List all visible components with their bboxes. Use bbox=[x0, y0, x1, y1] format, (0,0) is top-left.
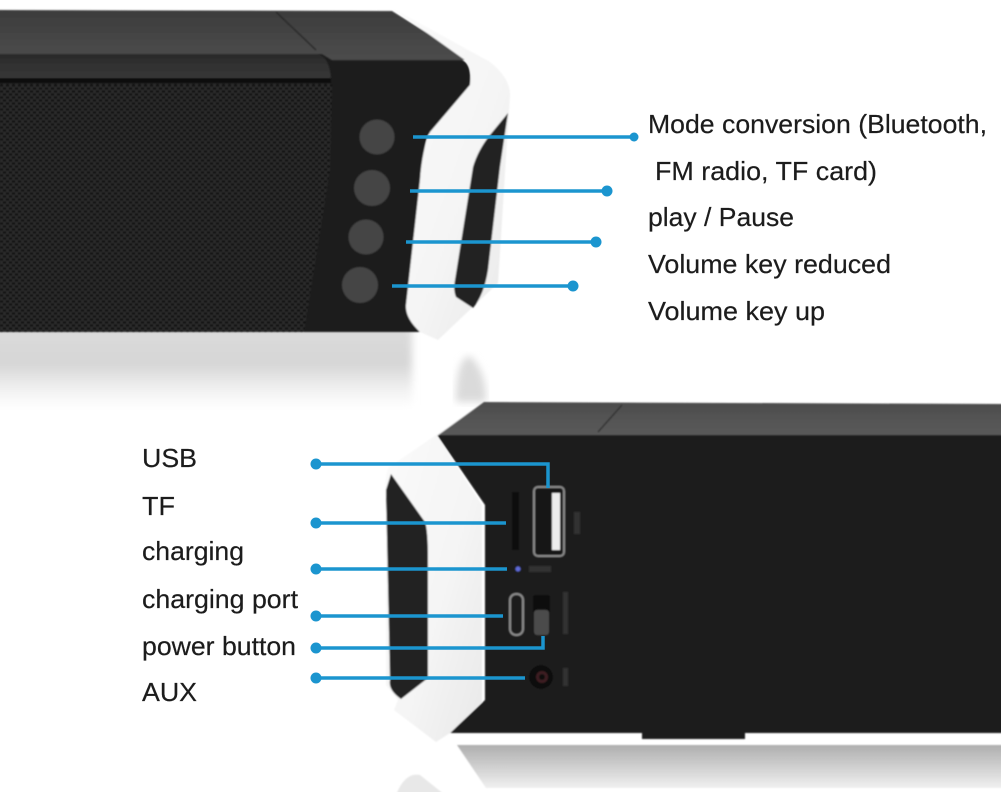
text: upper speaker labels: play / Pause bbox=[648, 202, 794, 232]
LED indicator bbox=[516, 566, 520, 572]
text: upper speaker labels: Volume key reduced bbox=[648, 249, 891, 279]
port markings bbox=[529, 512, 580, 686]
speaker top face bbox=[437, 402, 1001, 435]
volume down button bbox=[348, 220, 384, 254]
text: lower speaker labels: charging port bbox=[142, 584, 299, 614]
white end cap bbox=[385, 402, 484, 742]
text: lower speaker labels: USB bbox=[142, 443, 197, 473]
text: lower speaker labels: charging bbox=[142, 536, 244, 566]
white end cap bbox=[392, 8, 510, 340]
text: upper speaker labels bbox=[648, 109, 987, 326]
speaker front body bbox=[0, 54, 470, 332]
text: lower speaker labels: AUX bbox=[142, 677, 197, 707]
mode button bbox=[360, 120, 394, 154]
play button bbox=[354, 170, 390, 206]
callout lines: lower speaker bbox=[310, 458, 548, 684]
TF card slot bbox=[512, 492, 519, 550]
text: upper speaker labels: Mode conversion (Bluetooth, bbox=[648, 109, 987, 139]
callout lines: upper speaker bbox=[392, 132, 638, 292]
text: upper speaker labels: FM radio, TF card) bbox=[655, 156, 877, 186]
text: lower speaker labels bbox=[142, 443, 299, 707]
speaker mesh grille bbox=[0, 84, 332, 332]
volume up button bbox=[342, 267, 378, 303]
USB port bbox=[534, 487, 564, 556]
speaker top face bbox=[0, 10, 470, 60]
end cap opening bbox=[454, 113, 508, 308]
panel: lower speaker reflection bbox=[396, 745, 1001, 792]
end cap opening bbox=[386, 474, 428, 699]
panel: upper speaker reflection bbox=[0, 320, 486, 408]
panel: upper speaker front view bbox=[0, 8, 510, 340]
text: lower speaker labels: TF bbox=[142, 491, 175, 521]
text: upper speaker labels: Volume key up bbox=[648, 296, 825, 326]
text: lower speaker labels: power button bbox=[142, 631, 296, 661]
panel: lower speaker rear view bbox=[385, 402, 1001, 742]
power switch bbox=[533, 595, 550, 635]
AUX jack bbox=[529, 665, 553, 689]
speaker back body bbox=[437, 435, 1001, 739]
charging port bbox=[510, 594, 523, 635]
